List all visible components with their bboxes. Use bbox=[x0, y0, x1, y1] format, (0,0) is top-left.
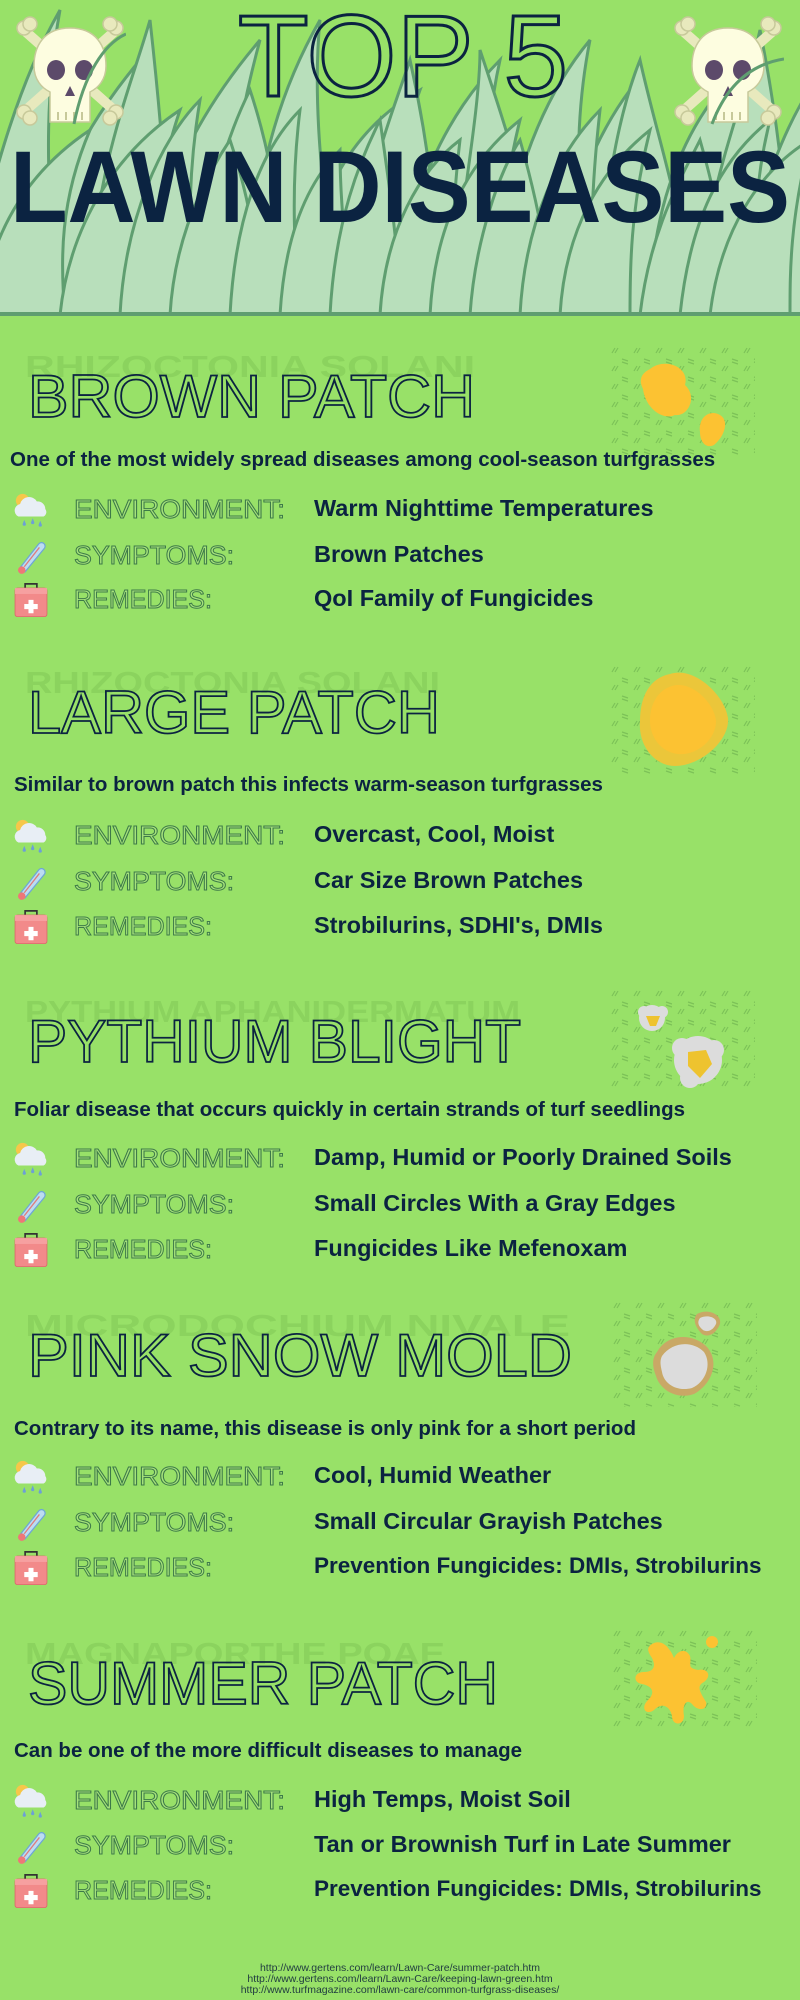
row: summer patch symptoms: Tan or Brownish Turf in Late Summer bbox=[314, 1831, 731, 1857]
row: summer patch environment: ENVIRONMENT: bbox=[74, 1785, 285, 1815]
text: pythium description: Foliar disease that occurs quickly in certain strands of turf seedlings bbox=[14, 1098, 685, 1121]
heading: brown patch: RHIZOCTONIA SOLANI bbox=[25, 349, 475, 384]
row: pink snow mold remedies: Prevention Fungicides: DMIs, Strobilurins bbox=[314, 1553, 762, 1578]
panel: pink snow mold bbox=[14, 1303, 757, 1440]
row: large patch remedies bbox=[14, 910, 603, 944]
row: large patch symptoms bbox=[18, 866, 583, 900]
panel: pythium blight bbox=[14, 991, 755, 1121]
header: grass banner bbox=[0, 9, 800, 316]
row: pink snow mold symptoms bbox=[18, 1507, 663, 1541]
row: pink snow mold remedies bbox=[14, 1551, 762, 1585]
heading: summer patch: MAGNAPORTHE POAE bbox=[25, 1636, 445, 1671]
row: summer patch remedies bbox=[14, 1874, 762, 1908]
heading: large patch: RHIZOCTONIA SOLANI bbox=[25, 665, 440, 700]
illustration: large patch blob bbox=[612, 667, 755, 774]
row: pythium symptoms bbox=[18, 1189, 676, 1223]
row: pythium symptoms: Small Circles With a Gray Edges bbox=[314, 1190, 676, 1216]
text: brown patch description: One of the most widely spread diseases among cool-season turfgrasses bbox=[10, 448, 715, 471]
illustration: snow mold spot bbox=[614, 1303, 757, 1407]
row: brown patch environment: ENVIRONMENT: bbox=[74, 494, 285, 524]
row: summer patch remedies: Prevention Fungicides: DMIs, Strobilurins bbox=[314, 1876, 762, 1901]
sources: http://www.turfmagazine.com/lawn-care/common-turfgrass-diseases/ bbox=[241, 1984, 559, 1996]
row: pink snow mold symptoms: SYMPTOMS: bbox=[74, 1507, 234, 1537]
row: pythium remedies: Fungicides Like Mefenoxam bbox=[314, 1235, 627, 1261]
row: large patch remedies: REMEDIES: bbox=[74, 911, 212, 941]
row: large patch remedies: Strobilurins, SDHI's, DMIs bbox=[314, 912, 603, 938]
row: pythium symptoms: SYMPTOMS: bbox=[74, 1189, 234, 1219]
row: summer patch symptoms bbox=[18, 1830, 731, 1864]
row: brown patch environment bbox=[14, 494, 654, 527]
row: brown patch environment: Warm Nighttime Temperatures bbox=[314, 495, 654, 521]
panel: brown patch bbox=[10, 348, 755, 471]
title bbox=[10, 0, 790, 230]
row: pythium remedies: REMEDIES: bbox=[74, 1234, 212, 1264]
row: brown patch remedies bbox=[14, 583, 593, 617]
row: large patch environment bbox=[14, 820, 554, 853]
row: summer patch remedies: REMEDIES: bbox=[74, 1875, 212, 1905]
illustration: summer patch splat bbox=[614, 1631, 757, 1726]
row: brown patch symptoms: Brown Patches bbox=[314, 541, 484, 567]
illustration: brown patch spots bbox=[612, 348, 755, 454]
row: pythium remedies bbox=[14, 1233, 627, 1267]
panel: large patch bbox=[14, 665, 755, 796]
row: large patch environment: Overcast, Cool, Moist bbox=[314, 821, 554, 847]
sources: http://www.gertens.com/learn/Lawn-Care/keeping-lawn-green.htm bbox=[247, 1973, 553, 1985]
row: large patch symptoms: SYMPTOMS: bbox=[74, 866, 234, 896]
row: pink snow mold environment: Cool, Humid Weather bbox=[314, 1462, 551, 1488]
row: brown patch symptoms bbox=[18, 540, 484, 574]
heading: pythium blight: PYTHIUM APHANIDERMATUM bbox=[25, 994, 520, 1029]
row: pythium environment: ENVIRONMENT: bbox=[74, 1143, 285, 1173]
row: large patch symptoms: Car Size Brown Patches bbox=[314, 867, 583, 893]
row: pythium environment bbox=[14, 1142, 732, 1176]
panel: summer patch bbox=[14, 1631, 757, 1762]
sources: http://www.gertens.com/learn/Lawn-Care/summer-patch.htm bbox=[260, 1962, 540, 1974]
illustration: pythium spots bbox=[612, 991, 755, 1088]
icon: left skull bbox=[16, 16, 126, 126]
row: large patch environment: ENVIRONMENT: bbox=[74, 820, 285, 850]
row: pink snow mold environment bbox=[14, 1460, 551, 1494]
heading: pink snow mold: MICRODOCHIUM NIVALE bbox=[25, 1308, 570, 1343]
text: summer patch description: Can be one of the more difficult diseases to manage bbox=[14, 1739, 522, 1762]
row: summer patch environment bbox=[14, 1784, 571, 1818]
row: summer patch environment: High Temps, Moist Soil bbox=[314, 1786, 571, 1812]
text: large patch description: Similar to brown patch this infects warm-season turfgrasses bbox=[14, 773, 603, 796]
icon: right skull bbox=[674, 16, 784, 126]
row: pink snow mold symptoms: Small Circular Grayish Patches bbox=[314, 1508, 663, 1534]
row: brown patch remedies: REMEDIES: bbox=[74, 584, 212, 614]
row: pink snow mold remedies: REMEDIES: bbox=[74, 1552, 212, 1582]
text: pink snow mold description: Contrary to its name, this disease is only pink for a short period bbox=[14, 1417, 636, 1440]
row: pythium environment: Damp, Humid or Poorly Drained Soils bbox=[314, 1144, 732, 1170]
row: brown patch symptoms: SYMPTOMS: bbox=[74, 540, 234, 570]
row: brown patch remedies: QoI Family of Fungicides bbox=[314, 585, 593, 611]
row: pink snow mold environment: ENVIRONMENT: bbox=[74, 1461, 285, 1491]
row: summer patch symptoms: SYMPTOMS: bbox=[74, 1830, 234, 1860]
sources bbox=[241, 1962, 560, 1996]
